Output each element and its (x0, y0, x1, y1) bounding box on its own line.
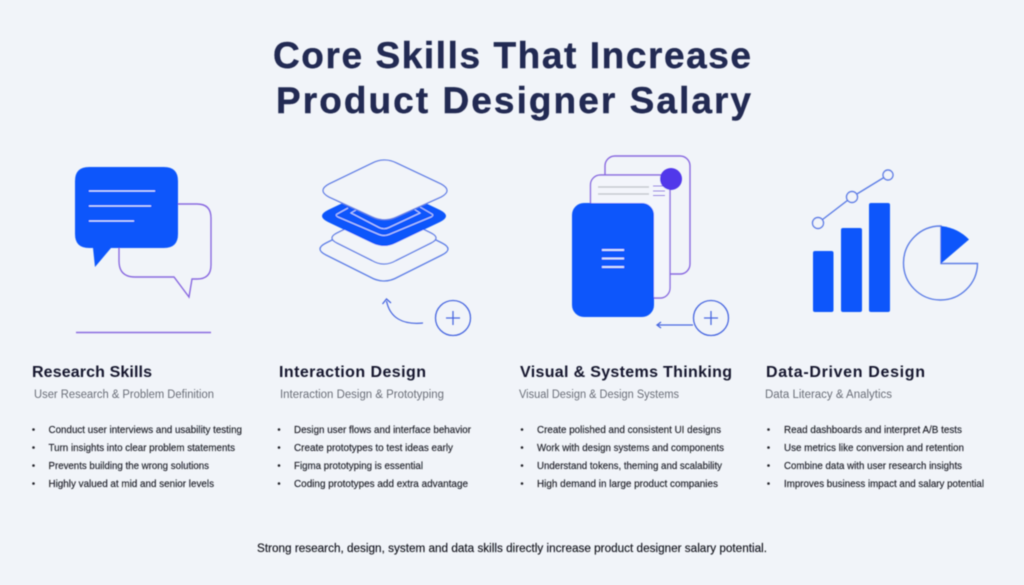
title: Product Designer Salary (276, 80, 751, 121)
icon: chat bubbles (75, 167, 211, 332)
bullet list: visual: Create polished and consistent UI designs (537, 425, 721, 436)
icon: pie chart (904, 226, 978, 300)
bullet list: data: Combine data with user research insights (784, 461, 962, 472)
heading: data-driven design: Data-Driven Design (766, 364, 925, 381)
icon: stacked layers (320, 160, 448, 281)
panel: data-driven design (765, 364, 984, 490)
bullet list: interaction: Design user flows and interface behavior (294, 425, 472, 436)
footer note: Strong research, design, system and data skills directly increase product designer salary potential. (257, 543, 767, 555)
subheading: visual: Visual Design & Design Systems (519, 389, 679, 401)
subheading: research: User Research & Problem Definition (34, 389, 214, 401)
bullet list: research: Prevents building the wrong solutions (48, 461, 209, 472)
bullet list: visual: Understand tokens, theming and scalability (537, 461, 723, 472)
icon: document stack (572, 156, 690, 317)
bullet list: visual (521, 425, 724, 490)
heading: research skills: Research Skills (32, 364, 152, 381)
bullet list: interaction: Coding prototypes add extra advantage (294, 479, 468, 490)
subheading: data: Data Literacy & Analytics (765, 389, 892, 401)
bullet list: visual: Work with design systems and components (537, 443, 724, 454)
panel: research skills (32, 364, 242, 490)
heading: interaction design: Interaction Design (279, 364, 426, 381)
bullet list: interaction: Figma prototyping is essential (294, 461, 423, 472)
bullet list: data: Use metrics like conversion and retention (784, 443, 964, 454)
icon: add with straight arrow (657, 300, 728, 336)
panel: interaction design (278, 364, 472, 490)
bullet list: research: Highly valued at mid and senior levels (48, 479, 214, 490)
icon: bar chart with trend line (812, 170, 893, 312)
icon: add with curved arrow (382, 299, 470, 336)
title (273, 35, 751, 121)
bullet list: interaction (278, 425, 472, 490)
bullet list: data: Read dashboards and interpret A/B tests (784, 425, 962, 436)
bullet list: research: Conduct user interviews and usability testing (48, 425, 242, 436)
heading: visual and systems thinking: Visual & Systems Thinking (520, 364, 732, 381)
panel: visual and systems thinking (519, 364, 732, 490)
bullet list: data (767, 425, 984, 490)
subheading: interaction: Interaction Design & Prototyping (280, 389, 444, 401)
bullet list: visual: High demand in large product companies (537, 479, 718, 490)
bullet list: interaction: Create prototypes to test ideas early (294, 443, 454, 454)
title: Core Skills That Increase (273, 35, 751, 76)
bullet list: research (32, 425, 242, 490)
bullet list: data: Improves business impact and salary potential (784, 479, 984, 490)
bullet list: research: Turn insights into clear problem statements (48, 443, 235, 454)
